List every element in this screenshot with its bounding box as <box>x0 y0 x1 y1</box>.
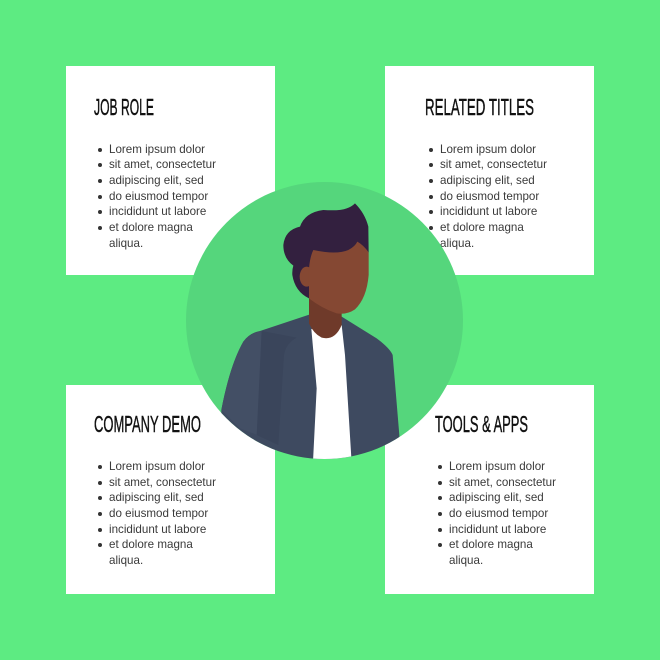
bullet list: job role: do eiusmod tempor <box>109 190 208 203</box>
bullet list: related titles: do eiusmod tempor <box>440 190 539 203</box>
jacket shading <box>221 338 246 410</box>
bullet list: company demo: sit amet, consectetur <box>109 476 216 489</box>
back hair <box>283 203 369 298</box>
illustration: person in circle <box>186 182 463 459</box>
bullet list: tools and apps: adipiscing elit, sed <box>449 491 544 504</box>
heading: job role: JOB ROLE <box>94 94 154 120</box>
bullet list: tools and apps: sit amet, consectetur <box>449 476 556 489</box>
shirt <box>311 325 352 468</box>
panel: job role <box>66 66 275 275</box>
bullet list: tools and apps <box>438 460 556 567</box>
bullet list: company demo <box>98 460 216 567</box>
bullet list: company demo: et dolore magna <box>109 538 193 551</box>
bullet list: related titles: aliqua. <box>440 237 474 250</box>
jacket <box>220 314 400 468</box>
face <box>309 242 369 314</box>
bullet list: job role: adipiscing elit, sed <box>109 174 204 187</box>
bullet list: job role: sit amet, consectetur <box>109 158 216 171</box>
bullet list: tools and apps: et dolore magna <box>449 538 533 551</box>
bullet list: tools and apps: Lorem ipsum dolor <box>449 460 545 473</box>
person <box>220 203 400 468</box>
bullet list: company demo: Lorem ipsum dolor <box>109 460 205 473</box>
bullet list: related titles: sit amet, consectetur <box>440 158 547 171</box>
panel: company demo <box>66 385 275 594</box>
bullet list: related titles <box>429 142 547 250</box>
panel: related titles <box>385 66 594 275</box>
bullet list: job role: aliqua. <box>109 237 143 250</box>
bullet list: job role: Lorem ipsum dolor <box>109 142 205 156</box>
green circle backdrop <box>186 182 463 459</box>
jacket fold <box>257 386 260 434</box>
bullet list: company demo: do eiusmod tempor <box>109 507 208 520</box>
bullet list: related titles: Lorem ipsum dolor <box>440 142 536 156</box>
bullet list: tools and apps: do eiusmod tempor <box>449 507 548 520</box>
bullet list: job role: incididunt ut labore <box>109 205 206 218</box>
panel: tools and apps <box>385 385 594 594</box>
ear <box>300 266 310 287</box>
bullet list: related titles: et dolore magna <box>440 221 524 234</box>
bullet list: job role <box>98 142 216 250</box>
bullet list: tools and apps: aliqua. <box>449 554 483 567</box>
neck <box>309 298 342 338</box>
bullet list: related titles: incididunt ut labore <box>440 205 537 218</box>
bullet list: company demo: incididunt ut labore <box>109 523 206 536</box>
bullet list: job role: et dolore magna <box>109 221 193 234</box>
bullet list: company demo: adipiscing elit, sed <box>109 491 204 504</box>
bullet list: related titles: adipiscing elit, sed <box>440 174 535 187</box>
bullet list: company demo: aliqua. <box>109 554 143 567</box>
bullet list: tools and apps: incididunt ut labore <box>449 523 546 536</box>
